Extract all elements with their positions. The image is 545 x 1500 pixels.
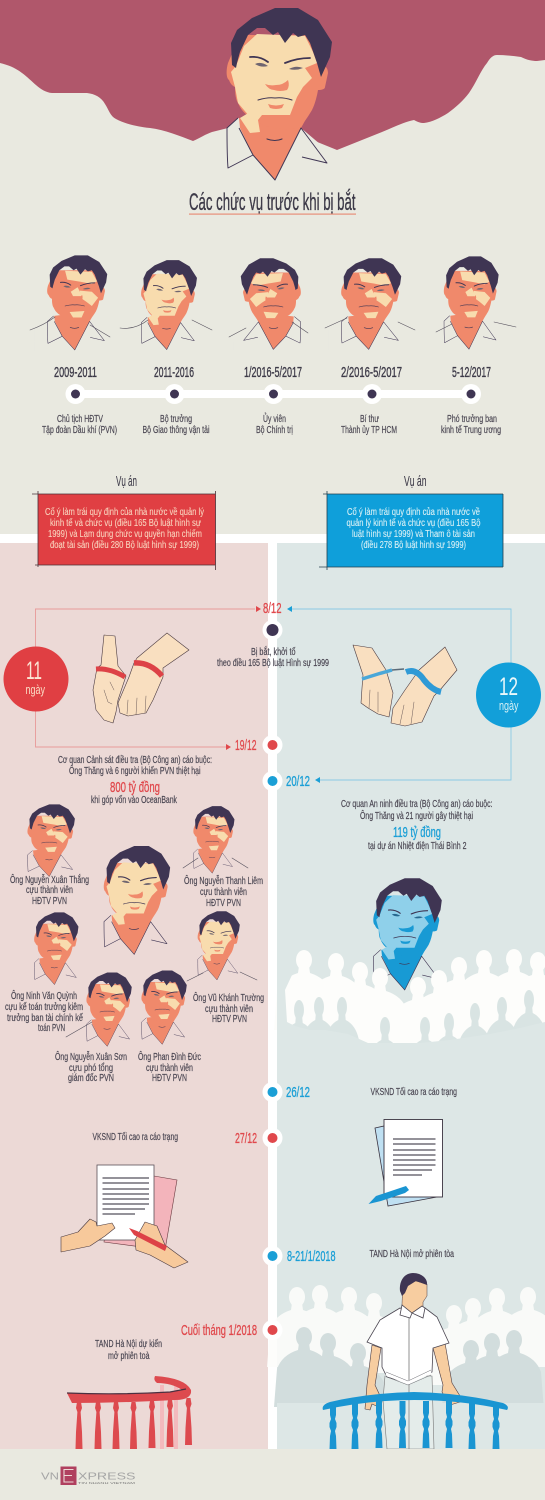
timeline dates: 2011-2016 [154,364,194,381]
timeline of positions [66,384,481,404]
portrait Vu Khanh Truong [187,911,257,981]
white band [0,534,545,543]
belt [386,1372,431,1383]
arrest text: Bị bắt, khởi tố [251,645,296,658]
left accusation text: Cơ quan Cảnh sát điều tra (Bộ Công an) cáo buộc: [58,754,212,766]
left panel [0,543,268,1449]
red case box: Cố ý làm trái quy định của nhà nước về quản lý [45,506,204,518]
position descriptions [42,412,501,436]
blue case box: (điều 278 Bộ luật hình sự 1999) [361,539,466,551]
center timeline band [268,534,277,1449]
right accusation text [341,798,492,852]
left bracket 11 days [36,606,261,750]
group of left defendants [18,804,257,1047]
11 days circle: 11 [26,657,42,685]
panel cover under court crowd [277,1403,545,1449]
arrest text [217,645,329,669]
blue case box: Cố ý làm trái quy định của nhà nước về [347,506,480,518]
left accusation text: khi góp vốn vào OceanBank [91,794,178,806]
name Phan Dinh Duc: cựu thành viên [146,1063,193,1074]
name Ninh Van Quynh: toán PVN [38,1023,65,1034]
portrait Nguyen Xuan Son [66,972,137,1047]
left trial text: mở phiên toà [108,1350,150,1362]
date 8/12: 8/12 [263,600,282,617]
name Vu Khanh Truong: cựu thành viên [205,1004,253,1015]
timeline stop 3 [264,384,284,404]
white crowd row [274,949,545,1057]
portraits of five positions [30,255,516,351]
blue case box: quản lý kinh tế và chức vụ (điều 165 Bộ [346,517,481,529]
12 days circle [476,662,541,728]
date 26/12: 26/12 [286,1084,310,1101]
portrait Nguyen Thanh Liem [183,806,248,874]
portrait Phan Dinh Duc [132,970,192,1045]
case heading left: Vụ án [116,473,137,490]
VnExpress logo [41,1466,136,1485]
name Nguyen Xuan Son [55,1050,127,1084]
blue case box: luật hình sự 1999) và Tham ô tài sản [352,529,475,540]
timeline dates: 2009-2011 [54,364,97,381]
defendant names [5,873,264,1084]
blue railing [323,1392,508,1450]
portrait 3 [229,258,313,350]
timeline stop 5 [461,384,481,404]
white shirt [367,1308,449,1383]
name Ninh Van Quynh [5,989,83,1034]
left trial text [95,1338,162,1362]
VnExpress logo: TIN NHANH VIETNAM [78,1481,136,1485]
main portrait [205,8,345,182]
left trial text: TAND Hà Nội dự kiến [95,1338,162,1350]
icon: document, hands and red pen [61,1165,188,1268]
right trial text: TAND Hà Nội mở phiên tòa [370,1248,454,1260]
name Nguyen Xuan Thang: HĐTV PVN [32,896,67,907]
background crowd row [280,990,545,1097]
blue case box [319,491,503,570]
position descriptions: Bộ Giao thông vận tải [142,425,210,436]
icon: red cuffed hands [93,633,189,723]
position descriptions: Bộ Chính trị [256,425,293,436]
arrest text: theo điều 165 Bộ luật Hình sự 1999 [217,657,329,669]
red case box: đoạt tài sản (điều 280 Bộ luật hình sự 1999) [50,539,199,551]
name Nguyen Xuan Son: cựu phó tổng [69,1062,113,1074]
timeline dot 19/12 [262,735,282,755]
left accusation text: 800 tỷ đồng [110,779,160,796]
name Ninh Van Quynh: trưởng ban tài chính kế [7,1012,83,1024]
red case box [32,491,216,570]
name Vu Khanh Truong: Ông Vũ Khánh Trường [193,991,264,1004]
red case box: 1999) và Lạm dụng chức vụ quyền hạn chiếm [48,528,202,540]
red railing [67,1376,192,1449]
portrait 5 [433,256,516,350]
timeline stop 2 [164,384,184,404]
position descriptions: Chủ tịch HĐTV [57,413,103,425]
name Nguyen Xuan Thang: Ông Nguyễn Xuân Thắng [10,873,89,886]
name Nguyen Xuan Thang: cựu thành viên [26,885,73,896]
right accusation text: 119 tỷ đồng [393,824,441,841]
date 8-21/1/2018: 8-21/1/2018 [287,1248,336,1265]
panel cover below crowd [277,960,545,1105]
head [402,1280,427,1313]
right accusation text: tại dự án Nhiệt điện Thái Bình 2 [368,841,467,852]
timeline stop 1 [66,384,86,404]
timeline stop 4 [362,384,382,404]
left accusation text [58,754,212,806]
name Phan Dinh Duc: Ông Phan Đình Đức [138,1050,201,1063]
position descriptions: Bí thư [360,414,379,425]
left accusation text: Ông Thăng và 6 người khiến PVN thiệt hại [69,764,200,777]
portrait 2 [120,260,212,351]
name Ninh Van Quynh: Ông Ninh Văn Quỳnh [11,989,77,1002]
name Phan Dinh Duc [138,1050,201,1084]
name Vu Khanh Truong: HĐTV PVN [212,1014,247,1025]
right arm [433,1343,460,1405]
timeline dot 20/12 [262,771,282,791]
right panel [277,543,545,1449]
right indictment text: VKSND Tối cao ra cáo trạng [370,1086,457,1098]
position descriptions: Phó trưởng ban [447,413,497,425]
position descriptions: Bộ trưởng [160,413,192,425]
11 days circle: ngày [26,682,45,697]
timeline dot end of January 2018 [262,1320,282,1340]
name Nguyen Xuan Thang [10,873,89,907]
white court crowd [267,1285,545,1385]
red case box: kinh tế và chức vụ (điều 165 Bộ luật hình sự [50,517,201,529]
position descriptions: Thành ủy TP HCM [341,424,397,436]
timeline dates: 1/2016-5/2017 [244,364,302,381]
title: Các chức vụ trước khi bị bắt [189,189,356,216]
collar [400,1305,425,1318]
timeline dot 26/12 [262,1082,282,1102]
portrait 4 [325,258,415,350]
portrait Nguyen Xuan Thang [18,804,81,877]
shaded court crowd [274,1327,544,1423]
timeline dates: 5-12/2017 [452,364,491,381]
timeline dot 8-21/1/2018 [262,1246,282,1266]
name Nguyen Thanh Liem: Ông Nguyễn Thanh Liêm [184,874,263,887]
position descriptions: kinh tế Trung ương [441,424,501,436]
timeline dot 27/12 [262,1128,282,1148]
timeline dates: 2/2016-5/2017 [341,364,402,381]
date 20/12: 20/12 [286,773,310,790]
VnExpress logo: XPRESS [78,1472,136,1482]
name Vu Khanh Truong [193,991,264,1025]
defendant standing in court [365,1273,460,1449]
name Nguyen Xuan Son: giám đốc PVN [68,1072,114,1084]
date 27/12: 27/12 [235,1130,257,1147]
11 days circle [4,646,68,712]
12 days circle: 12 [499,673,518,701]
icon: blue cuffed hands [353,645,457,726]
header maroon mountain band [0,0,545,150]
icon: document and blue pen [368,1120,442,1206]
right bracket 12 days [287,606,511,783]
name Phan Dinh Duc: HĐTV PVN [152,1073,187,1084]
position descriptions: Tập đoàn Dầu khí (PVN) [42,424,117,436]
12 days circle: ngày [499,698,519,713]
name Ninh Van Quynh: cựu kế toán trưởng kiêm [5,1001,83,1013]
left indictment text: VKSND Tối cao ra cáo trạng [92,1131,178,1143]
name Nguyen Thanh Liem [184,874,263,909]
date 19/12: 19/12 [235,737,256,754]
name Nguyen Thanh Liem: cựu thành viên [200,887,247,898]
timeline dot 8/12 [262,620,282,640]
crowd silhouettes [274,949,545,1105]
date end of January 2018: Cuối tháng 1/2018 [181,1322,257,1339]
trousers [383,1376,434,1449]
case heading right: Vụ án [404,473,426,490]
pale rear balusters [160,1385,164,1449]
center portrait [90,846,178,956]
court crowd silhouettes [267,1285,545,1449]
position descriptions: Ủy viên [263,412,286,425]
portrait Ninh Van Quynh [25,912,84,985]
footer band [0,1449,545,1500]
name Nguyen Thanh Liem: HĐTV PVN [206,898,241,909]
left arm [365,1345,382,1410]
portrait 1 [30,255,115,351]
right accusation text: Ông Thăng và 21 người gây thiệt hại [360,809,473,822]
blue portrait [359,878,450,991]
name Nguyen Xuan Son: Ông Nguyễn Xuân Sơn [55,1050,127,1063]
timeline dates [54,364,491,381]
VnExpress logo: VN [41,1472,59,1482]
